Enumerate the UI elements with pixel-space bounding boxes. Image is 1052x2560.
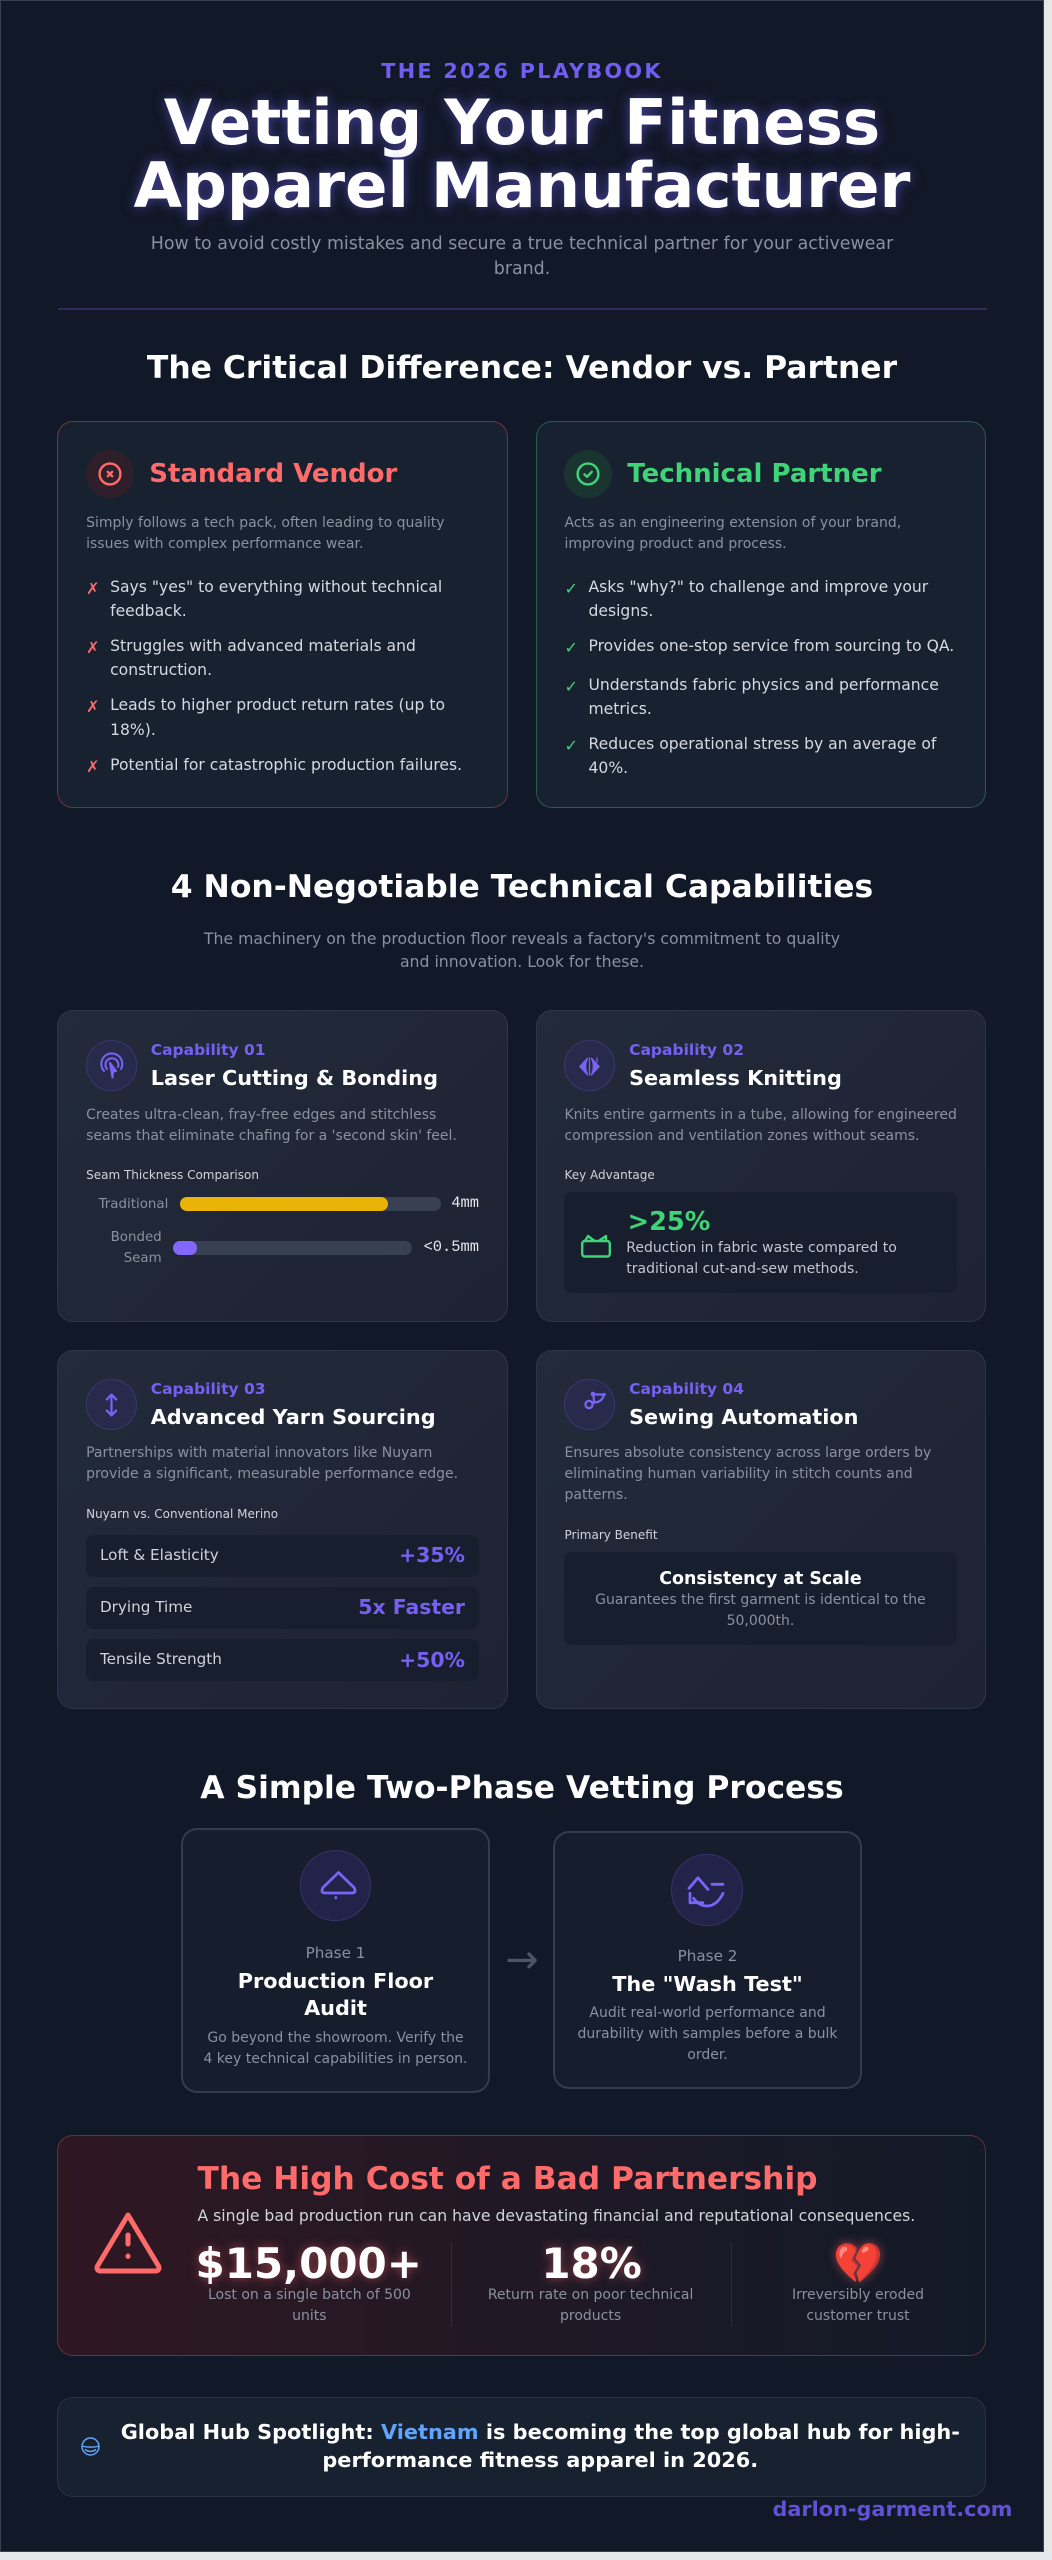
stat: return rate: 18% xyxy=(541,2239,642,2288)
capability label: Capability 04 xyxy=(629,1380,744,1398)
partner item 4 xyxy=(564,735,937,777)
panel: phase 1 xyxy=(181,1828,490,2093)
bar value: 4mm: 4mm xyxy=(451,1194,479,1212)
capability label: Capability 01 xyxy=(151,1041,266,1059)
phase description: 4 key technical capabilities in person. xyxy=(203,2051,468,2067)
partner item 1: Asks "why?" to challenge and improve your xyxy=(588,578,928,596)
partner heading: Technical Partner xyxy=(627,458,882,488)
benefit caption: 50,000th. xyxy=(727,1613,794,1629)
vendor item 2: construction. xyxy=(110,661,212,679)
title: Vetting Your Fitness xyxy=(164,86,880,159)
capability description: Partnerships with material innovators like Nuyarn xyxy=(86,1445,432,1461)
metric row: loft: +35% xyxy=(399,1543,465,1567)
subtitle: How to avoid costly mistakes and secure a true technical partner for your activewear xyxy=(151,234,893,254)
vendor item 1: ✗ xyxy=(86,579,100,598)
heading: vetting process: A Simple Two-Phase Vetting Process xyxy=(200,1770,844,1806)
stat caption xyxy=(626,1240,897,1277)
vendor description: issues with complex performance wear. xyxy=(86,536,363,552)
icon: sewing needle xyxy=(564,1379,615,1430)
panel: global hub spotlight xyxy=(57,2397,986,2497)
vendor item 4: Potential for catastrophic production failures. xyxy=(110,756,462,774)
icon: fabric waste xyxy=(581,1234,611,1258)
phase label: Phase 1 xyxy=(306,1944,365,1962)
bar: traditional xyxy=(180,1197,441,1211)
chart label: Seam Thickness Comparison xyxy=(86,1168,259,1182)
advantage label: Key Advantage xyxy=(564,1168,655,1182)
metric row: loft: Loft & Elasticity xyxy=(100,1546,219,1564)
bar label: bonded seam xyxy=(111,1230,162,1266)
capability description: patterns. xyxy=(564,1487,628,1503)
subtitle xyxy=(151,234,894,279)
phase title xyxy=(238,1969,434,2020)
vendor item 3: Leads to higher product return rates (up to xyxy=(110,696,445,714)
spotlight text: performance fitness apparel in 2026. xyxy=(322,2448,758,2472)
phase label: Phase 2 xyxy=(678,1947,737,1965)
panel: capability 02 xyxy=(536,1010,986,1322)
stat caption: traditional cut-and-sew methods. xyxy=(626,1261,859,1277)
capabilities intro text: and innovation. Look for these. xyxy=(400,952,644,971)
capability description: Knits entire garments in a tube, allowing for engineered xyxy=(564,1107,957,1123)
arrow: phase 1 to phase 2: → xyxy=(505,1937,539,1983)
stat: over 25 percent: >25% xyxy=(628,1207,710,1237)
partner item 4: Reduces operational stress by an average of xyxy=(588,735,936,753)
stat caption: trust: customer trust xyxy=(806,2308,910,2324)
capability description: compression and ventilation zones without seams. xyxy=(564,1128,919,1144)
stat caption: Reduction in fabric waste compared to xyxy=(626,1240,897,1256)
stat caption: return rate: products xyxy=(560,2308,621,2324)
source link: darlon-garment.com xyxy=(772,2496,1012,2520)
capability description: Ensures absolute consistency across large orders by xyxy=(564,1445,931,1461)
vendor description: Simply follows a tech pack, often leading to quality xyxy=(86,515,445,531)
primary benefit box xyxy=(564,1552,957,1645)
partner item 2: Provides one-stop service from sourcing to QA. xyxy=(588,637,954,655)
capability description xyxy=(86,1107,457,1144)
icon: globe xyxy=(81,2437,100,2456)
spotlight text: Global Hub Spotlight: Vietnam is becoming the top global hub for high- xyxy=(121,2420,960,2444)
title: Apparel Manufacturer xyxy=(134,149,910,222)
panel: capability 04 xyxy=(536,1350,986,1709)
bar: bonded seam xyxy=(173,1241,412,1255)
capability label: Capability 03 xyxy=(151,1380,266,1398)
vendor item 2: ✗ xyxy=(86,638,100,657)
phase description xyxy=(203,2030,468,2067)
capability label: Capability 02 xyxy=(629,1041,744,1059)
capability description xyxy=(564,1107,957,1144)
icon: vertical arrows xyxy=(86,1379,137,1430)
bar label: bonded seam: Bonded xyxy=(111,1230,162,1245)
panel: phase 2 xyxy=(553,1830,862,2089)
metric row: drying xyxy=(86,1587,479,1629)
partner item 1: ✓ xyxy=(564,579,578,598)
metric row: loft xyxy=(86,1535,479,1577)
capability title: Seamless Knitting xyxy=(629,1066,842,1090)
partner item 1 xyxy=(564,578,928,620)
subtitle: brand. xyxy=(494,259,550,279)
stat caption: dollar loss: units xyxy=(292,2308,327,2324)
key advantage box xyxy=(564,1192,957,1293)
capability description: seams that eliminate chafing for a 'second skin' feel. xyxy=(86,1128,457,1144)
phase title: Production Floor xyxy=(238,1969,433,1993)
partner item 3 xyxy=(564,676,939,718)
vendor item 3: ✗ xyxy=(86,697,100,716)
benefit label: Primary Benefit xyxy=(564,1528,658,1542)
phase title: Audit xyxy=(304,1996,367,2020)
stat caption: dollar loss: Lost on a single batch of 500 xyxy=(208,2287,411,2303)
comparison label: Nuyarn vs. Conventional Merino xyxy=(86,1507,278,1521)
vendor item 4: ✗ xyxy=(86,757,100,776)
benefit title: Consistency at Scale xyxy=(659,1569,862,1589)
panel: capability 01 xyxy=(57,1010,508,1322)
icon: warning triangle xyxy=(94,2212,162,2274)
metric row: tensile xyxy=(86,1639,479,1681)
cost heading: The High Cost of a Bad Partnership xyxy=(197,2161,818,2197)
capabilities intro text xyxy=(204,929,840,971)
vendor item 2 xyxy=(86,637,416,679)
capability title: Laser Cutting & Bonding xyxy=(151,1066,438,1090)
vendor item 2: Struggles with advanced materials and xyxy=(110,637,416,655)
icon: audit cloud xyxy=(300,1850,371,1921)
capability description: eliminating human variability in stitch counts and xyxy=(564,1466,913,1482)
bar label: traditional: Traditional xyxy=(99,1197,168,1212)
partner description: improving product and process. xyxy=(564,536,787,552)
vendor item 1: feedback. xyxy=(110,602,187,620)
panel: cost of a bad partnership xyxy=(57,2135,986,2356)
partner item 4: 40%. xyxy=(588,759,628,777)
vendor heading: Standard Vendor xyxy=(149,458,397,488)
phase description: durability with samples before a bulk xyxy=(578,2026,837,2042)
capabilities intro text: The machinery on the production floor reveals a factory's commitment to quality xyxy=(204,929,840,948)
stat caption: return rate xyxy=(488,2287,693,2324)
vendor item 3: 18%). xyxy=(110,721,156,739)
capability description: Creates ultra-clean, fray-free edges and stitchless xyxy=(86,1107,436,1123)
icon: wash cycle xyxy=(671,1854,743,1926)
capability description xyxy=(564,1445,931,1503)
benefit caption: Guarantees the first garment is identical to the xyxy=(595,1592,926,1608)
eyebrow: the 2026 playbook: THE 2026 PLAYBOOK xyxy=(381,59,663,83)
metric row: drying: Drying Time xyxy=(100,1598,192,1616)
heading: capabilities: 4 Non-Negotiable Technical Capabilities xyxy=(171,869,873,905)
phase description: order. xyxy=(687,2047,728,2063)
icon: broken heart: 💔 xyxy=(833,2240,883,2287)
metric row: tensile: +50% xyxy=(399,1648,465,1672)
partner description xyxy=(564,515,901,552)
bar label: bonded seam: Seam xyxy=(124,1251,162,1266)
icon: x circle xyxy=(86,450,134,498)
partner description: Acts as an engineering extension of your brand, xyxy=(564,515,901,531)
phase description xyxy=(578,2005,838,2063)
partner item 2: ✓ xyxy=(564,638,578,657)
capability description xyxy=(86,1445,458,1482)
vendor item 3 xyxy=(86,696,445,739)
partner item 3: metrics. xyxy=(588,700,652,718)
stat caption: trust xyxy=(792,2287,924,2324)
metric row: tensile: Tensile Strength xyxy=(100,1650,222,1668)
panel: capability 03 xyxy=(57,1350,508,1709)
stat caption: trust: Irreversibly eroded xyxy=(792,2287,924,2303)
icon: check circle xyxy=(564,450,612,498)
spotlight text xyxy=(121,2420,960,2472)
title xyxy=(128,86,916,227)
partner item 3: ✓ xyxy=(564,676,578,696)
capability title: Advanced Yarn Sourcing xyxy=(151,1405,436,1429)
partner item 4: ✓ xyxy=(564,736,578,755)
vendor description xyxy=(86,515,445,552)
vendor item 1 xyxy=(86,578,442,620)
heading: vendor vs partner: The Critical Difference: Vendor vs. Partner xyxy=(147,350,897,386)
cost subtitle: A single bad production run can have devastating financial and reputational consequences. xyxy=(197,2206,915,2225)
capability title: Sewing Automation xyxy=(629,1405,858,1429)
phase description: Audit real-world performance and xyxy=(589,2005,826,2021)
stat caption: dollar loss xyxy=(208,2287,411,2324)
bar value: under 0.5mm: <0.5mm xyxy=(424,1238,479,1256)
stat: dollar loss: $15,000+ xyxy=(195,2239,422,2288)
metric row: drying: 5x Faster xyxy=(358,1595,465,1619)
icon: laser cursor xyxy=(86,1040,137,1091)
benefit caption xyxy=(595,1592,926,1629)
phase description: Go beyond the showroom. Verify the xyxy=(207,2030,464,2046)
partner item 1: designs. xyxy=(588,602,653,620)
panel: technical partner xyxy=(536,421,986,808)
partner item 3: Understands fabric physics and performance xyxy=(588,676,939,694)
capability description: provide a significant, measurable performance edge. xyxy=(86,1466,458,1482)
vendor item 1: Says "yes" to everything without technical xyxy=(110,578,442,596)
phase title: The "Wash Test" xyxy=(612,1972,803,1996)
stat caption: return rate: Return rate on poor technical xyxy=(488,2287,693,2303)
icon: knit diamond xyxy=(564,1040,615,1091)
panel: standard vendor xyxy=(57,421,508,808)
